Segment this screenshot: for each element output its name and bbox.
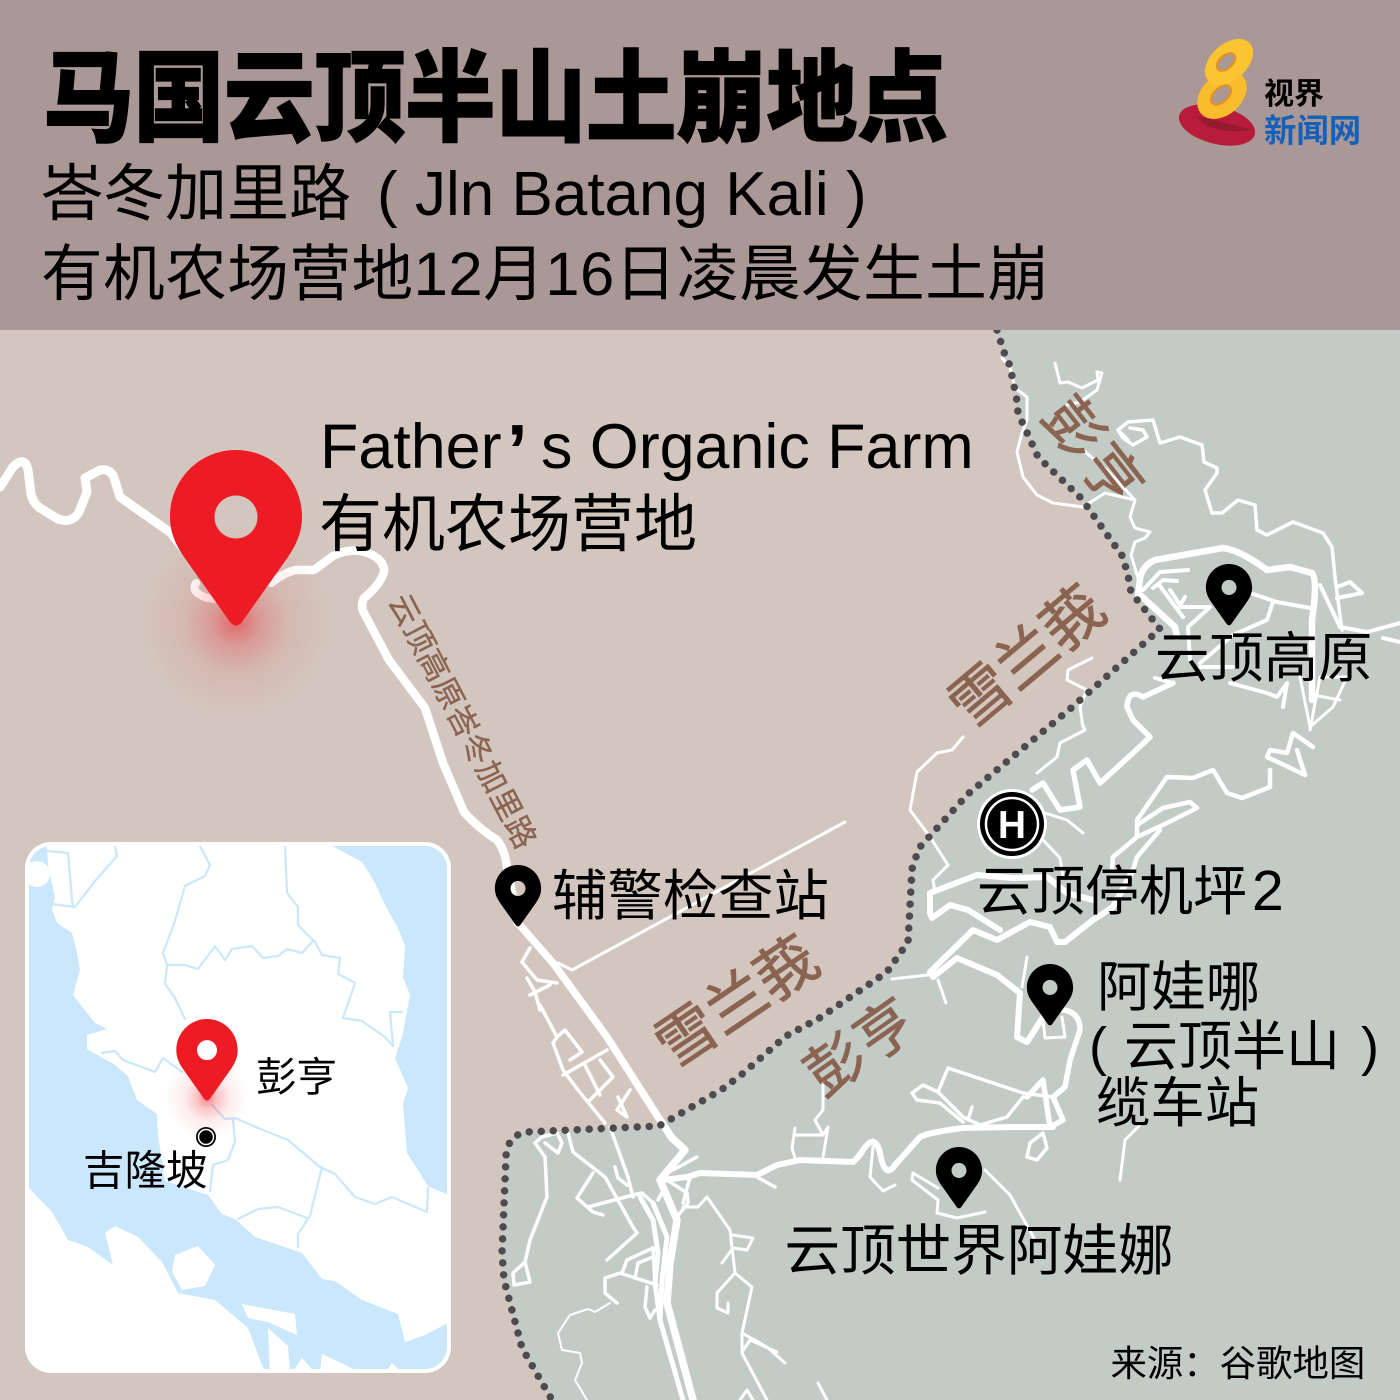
label: Father's Organic Farm: ’ — [507, 409, 528, 492]
pin: checkpoint — [495, 865, 541, 926]
icon: helipad — [977, 789, 1047, 859]
Genting Highlands roads — [1002, 358, 1150, 578]
inset islands — [172, 1246, 402, 1373]
road label: 云顶高原峇冬加里路 — [382, 588, 543, 854]
label: Awana cable car: 缆车站 — [1096, 1073, 1259, 1134]
subtitle line 2: 有机农场营地12月16日凌晨发生土崩 — [41, 240, 1049, 309]
header band — [0, 0, 1400, 330]
inset pin — [176, 1019, 238, 1101]
label: checkpoint: 辅警检查站 — [552, 865, 829, 927]
region label: Selangor north: 雪兰莪 — [936, 574, 1117, 741]
region label: Pahang north: 彭亨 — [1030, 385, 1156, 521]
pin: Resort World Awana — [936, 1147, 982, 1208]
main road network — [0, 358, 1400, 1400]
label: Awana cable car: 阿娃哪 — [1097, 957, 1260, 1018]
inset label: Kuala Lumpur: 吉隆坡 — [83, 1147, 208, 1194]
subtitle line 1: Jln Batang Kali — [415, 160, 829, 229]
label: Awana cable car — [1089, 957, 1379, 1134]
west network — [513, 1127, 657, 1318]
icon: helipad: H — [998, 804, 1026, 847]
inset west sea — [29, 846, 448, 1373]
inset marker: Kuala Lumpur — [196, 1127, 216, 1147]
label: helipad: 云顶停机坪 — [977, 862, 1247, 922]
south central — [683, 1197, 827, 1400]
label: Awana cable car: 云顶半山 — [1124, 1017, 1340, 1077]
pin: Father's Organic Farm — [170, 450, 302, 626]
inset east sea — [332, 846, 448, 1195]
region label: Selangor south: 雪兰莪 — [643, 924, 830, 1080]
Bukit Tinggi north cluster — [522, 948, 630, 1123]
region label: Pahang south: 彭亨 — [793, 986, 930, 1109]
logo text: 视界: 视界 — [1264, 78, 1324, 111]
label: Father's Organic Farm: s Organic Farm — [541, 412, 974, 482]
glow under main pin — [141, 527, 331, 717]
logo icon: gold 8 on red disc — [1175, 30, 1262, 153]
inset label: Pahang: 彭亨 — [256, 1054, 337, 1100]
heliport roads — [930, 870, 1133, 1042]
label: Father's Organic Farm: Father — [320, 412, 502, 482]
pin: Awana — [1027, 964, 1073, 1025]
panel: inset map of Peninsular Malaysia — [24, 842, 451, 1373]
pin: Genting Highlands — [1206, 564, 1252, 625]
logo: 8world news — [1175, 30, 1361, 153]
subtitle line 1: ) — [846, 160, 867, 229]
logo text: 新闻网: 新闻网 — [1264, 113, 1361, 149]
label: Genting Highlands: 云顶高原 — [1155, 628, 1373, 689]
source: 来源：谷歌地图 — [1110, 1343, 1365, 1384]
mid east: Awana mesh — [912, 1068, 1053, 1160]
label: helipad: 2 — [1252, 859, 1284, 923]
subtitle line 1: 峇冬加里路 — [41, 160, 351, 229]
inset glow — [165, 1056, 249, 1140]
title: 马国云顶半山土崩地点 — [43, 44, 948, 155]
label: Awana cable car: ) — [1361, 1017, 1379, 1077]
subtitle line 1: ( — [377, 160, 398, 229]
inset rivers — [48, 846, 428, 1247]
label: Awana cable car: ( — [1089, 1017, 1107, 1077]
map background: Selangor — [0, 330, 1400, 1400]
state border: dotted line — [502, 330, 1160, 1400]
map region: Pahang — [502, 330, 1400, 1400]
label: 有机农场营地: 有机农场营地 — [319, 490, 697, 560]
label: Resort World Awana: 云顶世界阿娃娜 — [784, 1220, 1174, 1282]
